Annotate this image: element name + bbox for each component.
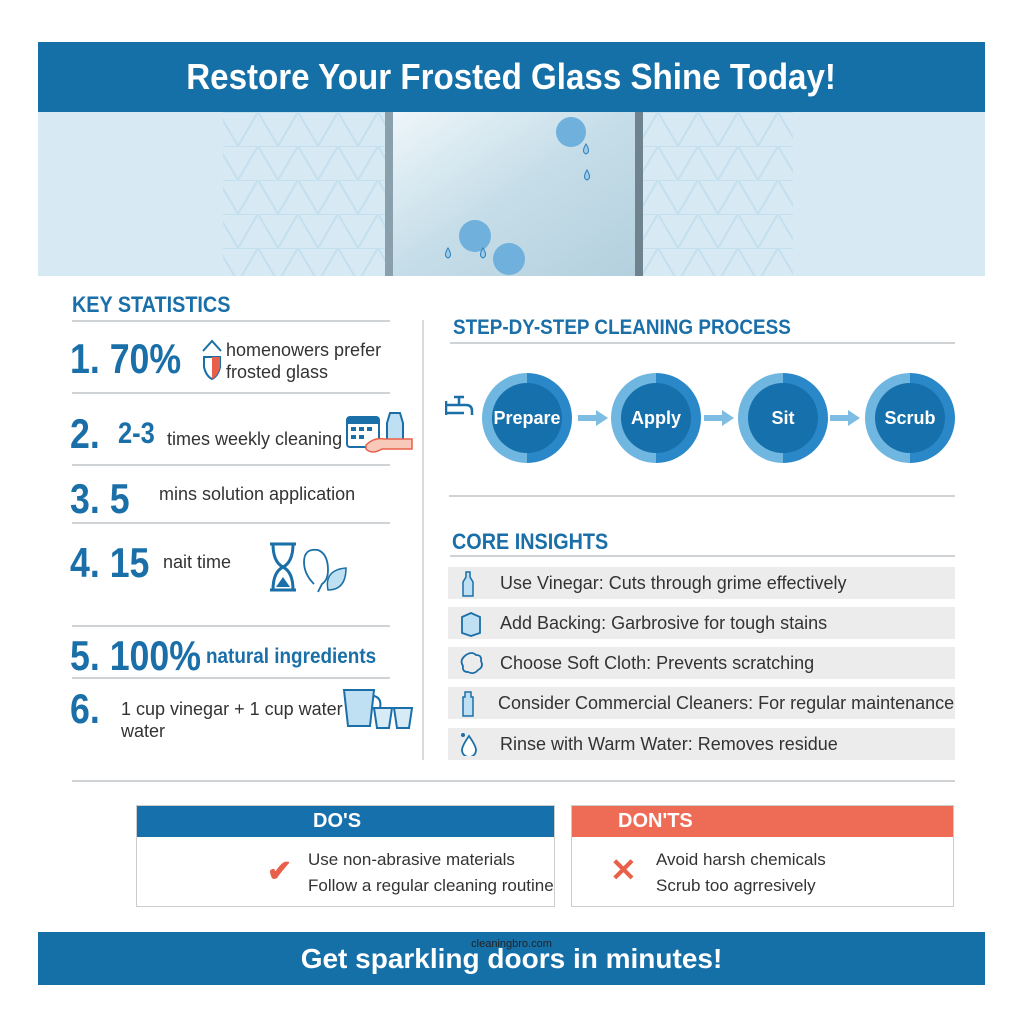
- stat 3: 3. 5: [70, 475, 130, 522]
- stat 2: [70, 410, 413, 457]
- stat 6: [70, 685, 414, 741]
- arrow: [830, 410, 860, 426]
- step: scrub: [865, 373, 955, 463]
- stat 6: water: [121, 721, 165, 741]
- stat 4: [70, 539, 347, 592]
- heading: step-by-step: STEP-DY-STEP CLEANING PROCESS: [453, 316, 791, 339]
- step: prepare: [482, 373, 572, 463]
- stat 5: [70, 632, 376, 679]
- insight 3: Choose Soft Cloth: Prevents scratching: [500, 653, 814, 673]
- insight 2: Add Backing: Garbrosive for tough stains: [500, 613, 827, 633]
- step: sit: Sit: [771, 408, 794, 428]
- icon: hourglass hand leaf: [270, 542, 347, 592]
- footer bar: Get sparkling doors in minutes!: [301, 943, 722, 974]
- title bar: [38, 42, 985, 112]
- stat 4: nait time: [163, 552, 231, 572]
- stat 6: 1 cup vinegar + 1 cup water: [121, 699, 343, 719]
- insight 1: [448, 567, 955, 599]
- insight 5: Rinse with Warm Water: Removes residue: [500, 734, 838, 754]
- stat 3: [70, 475, 355, 522]
- icon: calendar spray hand: [346, 412, 413, 453]
- hero image: frosted glass door: [38, 112, 985, 276]
- panel: do's: [136, 805, 555, 907]
- stat 5: natural ingredients: [206, 645, 376, 668]
- stat 2: 2.: [70, 410, 100, 457]
- stat 1: 1. 70%: [70, 335, 181, 382]
- panel: don'ts: DON'TS: [618, 810, 693, 832]
- process flow: [445, 373, 955, 463]
- stat 4: 4. 15: [70, 539, 149, 586]
- stat 1: homenowers prefer: [226, 340, 381, 360]
- step: apply: Apply: [631, 408, 681, 428]
- stat 5: 5. 100%: [70, 632, 201, 679]
- step: prepare: Prepare: [493, 408, 561, 428]
- icon: house shield: [202, 340, 222, 380]
- stat 2: 2-3: [118, 417, 155, 450]
- icon: cross: ✕: [610, 852, 637, 888]
- panel: do's: Follow a regular cleaning routine: [308, 876, 554, 895]
- arrow: [704, 410, 734, 426]
- icon: faucet: [445, 396, 474, 415]
- stat 1: frosted glass: [226, 362, 328, 382]
- footer bar: cleaningbro.com: [471, 938, 552, 950]
- icon: measuring cups: [342, 689, 414, 729]
- icon: check: ✔: [267, 855, 292, 888]
- panel: don'ts: Scrub too agrresively: [656, 876, 816, 895]
- panel: don'ts: Avoid harsh chemicals: [656, 850, 826, 869]
- step: scrub: Scrub: [884, 408, 936, 428]
- arrow: [578, 410, 608, 426]
- title bar: Restore Your Frosted Glass Shine Today!: [187, 56, 836, 97]
- insight 4: Consider Commercial Cleaners: For regular maintenance: [498, 693, 954, 713]
- insight 3: [448, 647, 955, 679]
- stat 1: [70, 335, 381, 382]
- heading: core insights: CORE INSIGHTS: [452, 529, 608, 554]
- insight 1: Use Vinegar: Cuts through grime effectively: [500, 573, 847, 593]
- panel: do's: Use non-abrasive materials: [308, 850, 515, 869]
- step: apply: [611, 373, 701, 463]
- heading: key statistics: KEY STATISTICS: [72, 292, 230, 317]
- stat 2: times weekly cleaning: [167, 429, 342, 449]
- footer bar: [38, 932, 985, 985]
- step: sit: [738, 373, 828, 463]
- panel: do's: DO'S: [313, 810, 361, 832]
- stat 6: 6.: [70, 685, 100, 732]
- panel: don'ts: [571, 805, 954, 907]
- insight 5: [448, 728, 955, 760]
- insight 2: [448, 607, 955, 639]
- stat 3: mins solution application: [159, 484, 355, 504]
- insight 4: [448, 687, 955, 719]
